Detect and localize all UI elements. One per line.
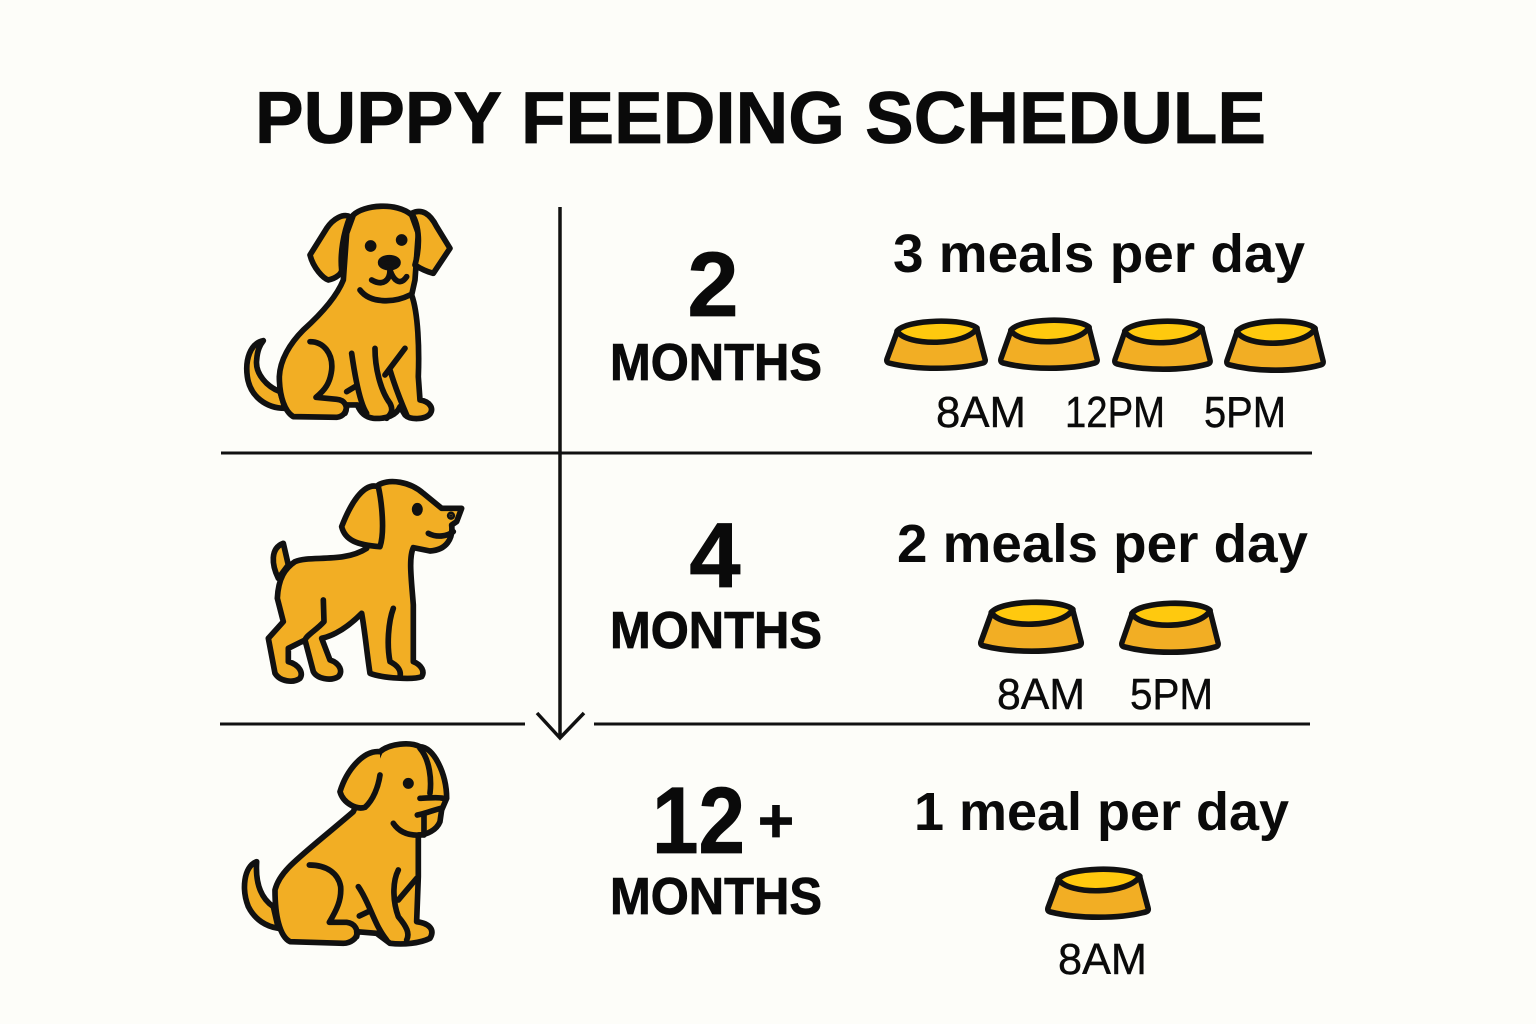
panel: 12+ months	[245, 744, 1289, 984]
meal count: 2 meals per day	[897, 514, 1308, 574]
bowls	[887, 320, 1323, 370]
age label: MONTHS	[610, 602, 822, 660]
age label	[610, 234, 822, 392]
row divider 1	[221, 452, 1312, 454]
row divider 2	[220, 722, 1310, 726]
meal count: 1 meal per day	[914, 782, 1289, 842]
bowls	[981, 602, 1218, 652]
meal times: 5PM	[1130, 670, 1213, 719]
icon: sitting puppy in profile	[245, 744, 447, 944]
age label	[610, 768, 822, 926]
age label: 2	[687, 234, 739, 336]
age label: 12	[652, 768, 745, 874]
title: PUPPY FEEDING SCHEDULE	[255, 78, 1266, 159]
meal count: 3 meals per day	[893, 224, 1305, 284]
age label	[610, 505, 822, 660]
age label: MONTHS	[610, 868, 822, 926]
meal times: 5PM	[1204, 388, 1286, 437]
age label: +	[758, 787, 794, 856]
meal times: 12PM	[1065, 388, 1165, 437]
timeline arrow	[537, 207, 584, 738]
meal times	[936, 388, 1286, 437]
meal times	[997, 670, 1213, 719]
age label: 4	[689, 505, 741, 607]
age label: MONTHS	[610, 334, 822, 392]
bowl	[1048, 869, 1148, 917]
icon: sitting puppy facing forward	[247, 206, 450, 419]
icon: standing puppy facing right	[268, 482, 462, 681]
panel: 4 months	[268, 482, 1308, 719]
meal times: 8AM	[997, 670, 1085, 719]
meal times: 8AM	[936, 388, 1026, 437]
panel: 2 months	[247, 206, 1323, 437]
meal time: 8AM	[1058, 935, 1147, 984]
